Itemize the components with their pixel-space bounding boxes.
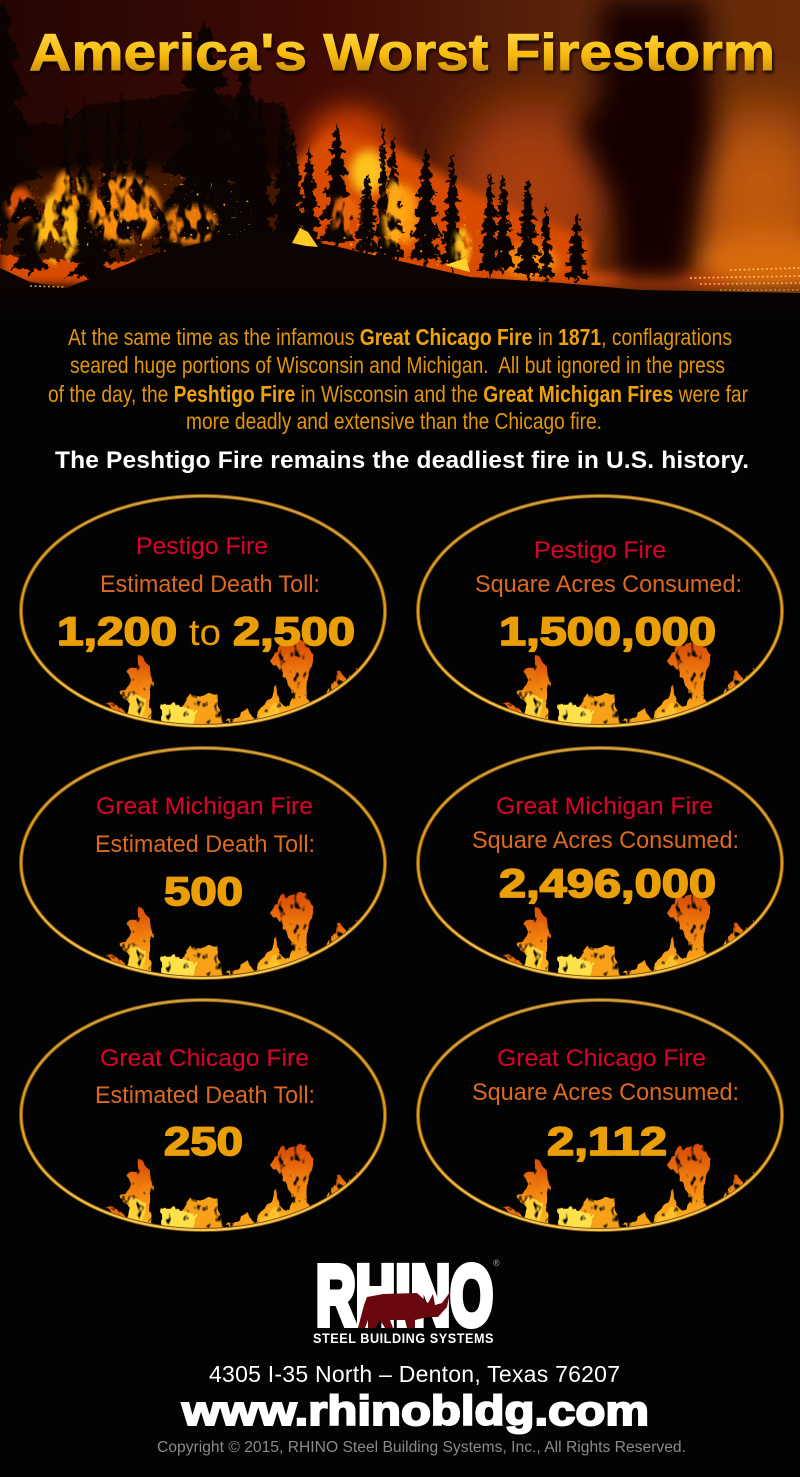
logo: RHINO Steel Building Systems: ® xyxy=(493,1258,500,1268)
hero photo: forest fire and fire tornado xyxy=(0,0,800,320)
key statement: The Peshtigo Fire remains the deadliest fire in U.S. history. xyxy=(55,447,749,474)
intro paragraph xyxy=(48,324,748,434)
tornado column xyxy=(575,0,712,280)
panel: Chicago death toll: Estimated Death Toll: xyxy=(95,1082,315,1109)
panel: Michigan acres consumed: Great Michigan Fire xyxy=(496,793,713,820)
panel: Peshtigo death toll: to xyxy=(189,612,221,653)
intro paragraph: more deadly and extensive than the Chicago fire. xyxy=(186,408,602,434)
panel: Chicago acres consumed: Square Acres Consumed: xyxy=(472,1079,739,1106)
intro paragraph: At the same time as the infamous Great Chicago Fire in 1871, conflagrations xyxy=(68,324,732,350)
logo: RHINO Steel Building Systems: RHINO xyxy=(316,1248,493,1342)
panel: Michigan acres consumed xyxy=(418,748,782,984)
fire showing between the trees xyxy=(6,170,470,268)
panel: Peshtigo acres consumed: Square Acres Consumed: xyxy=(475,571,742,598)
logo: RHINO Steel Building Systems xyxy=(313,1248,500,1346)
website: www.rhinobldg.com xyxy=(181,1387,649,1434)
panel: Peshtigo death toll: Estimated Death Toll: xyxy=(100,571,320,598)
panel: Peshtigo acres consumed: 1,500,000 xyxy=(499,610,716,654)
panel: Peshtigo death toll: 1,200 xyxy=(57,610,177,654)
panel: Chicago acres consumed: Great Chicago Fire xyxy=(497,1045,706,1072)
intro paragraph: of the day, the Peshtigo Fire in Wisconsin and the Great Michigan Fires were far xyxy=(48,381,748,407)
panel: Michigan death toll: Great Michigan Fire xyxy=(96,793,313,820)
panel: Michigan death toll xyxy=(21,748,385,984)
panel: Chicago death toll: 250 xyxy=(164,1120,243,1164)
embers glowing through the trees xyxy=(5,173,540,268)
panel: Peshtigo acres consumed xyxy=(418,496,782,732)
panel: Chicago death toll: Great Chicago Fire xyxy=(100,1045,309,1072)
panel: Peshtigo acres consumed: Pestigo Fire xyxy=(534,537,666,564)
panel: Michigan acres consumed: Square Acres Consumed: xyxy=(472,827,739,854)
panel: Michigan death toll: Estimated Death Toll: xyxy=(95,831,315,858)
panel: Michigan death toll: 500 xyxy=(164,870,243,914)
panel: Chicago death toll xyxy=(21,1000,385,1236)
dense dark forest mass behind the trees xyxy=(0,90,298,265)
panel: Chicago acres consumed xyxy=(418,1000,782,1236)
panel: Peshtigo death toll xyxy=(21,496,385,732)
address: 4305 I-35 North – Denton, Texas 76207 xyxy=(209,1361,620,1387)
title: America's Worst Firestorm xyxy=(29,24,775,82)
panel: Chicago acres consumed: 2,112 xyxy=(547,1120,667,1164)
panel: Peshtigo death toll: 2,500 xyxy=(233,610,355,654)
copyright: Copyright © 2015, RHINO Steel Building Systems, Inc., All Rights Reserved. xyxy=(157,1439,686,1456)
panel: Peshtigo death toll: Pestigo Fire xyxy=(136,533,268,560)
panel: Michigan acres consumed: 2,496,000 xyxy=(499,862,716,906)
logo: RHINO Steel Building Systems: STEEL BUILDING SYSTEMS xyxy=(313,1330,494,1346)
